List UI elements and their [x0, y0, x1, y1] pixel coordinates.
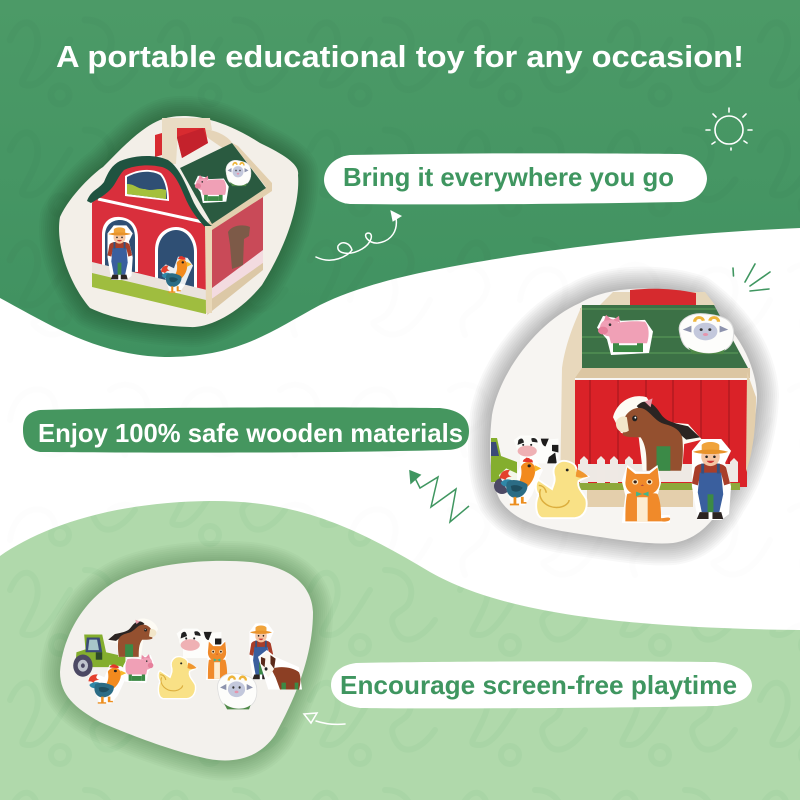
icon: tractor [491, 438, 517, 494]
blob backdrop [59, 116, 298, 327]
icon: farmer figure [249, 623, 274, 680]
blob shadow [59, 116, 298, 327]
blob shadow [60, 561, 313, 761]
icon: cat figure [206, 640, 232, 680]
pill: screen-free playtime: Encourage screen-free playtime [340, 670, 737, 700]
icon: pig toy [597, 315, 653, 355]
icon: duck toy [536, 461, 588, 518]
pill: bring it everywhere [324, 153, 707, 204]
pill: bring it everywhere: Bring it everywhere you go [343, 162, 674, 192]
arrow: small white back [304, 713, 345, 724]
pill: safe wooden materials [23, 407, 469, 453]
pill: safe wooden materials: Enjoy 100% safe wooden materials [38, 418, 463, 448]
icon: sheep figure [218, 673, 257, 709]
icon: pig sticker [194, 175, 229, 203]
icon: sun [706, 108, 752, 150]
icon: farmer toy [692, 439, 731, 520]
icon: cat toy [622, 465, 670, 523]
blob backdrop [60, 561, 313, 761]
panel: figures photo [60, 561, 313, 761]
icon: pig figure [123, 654, 154, 683]
blob shadow [490, 289, 757, 543]
icon: horse toy [613, 396, 702, 471]
blob backdrop [490, 289, 757, 543]
icon: cow [514, 436, 558, 463]
arrow: curly white [316, 211, 401, 260]
icon: tractor figure [73, 634, 125, 677]
pill: screen-free playtime [331, 661, 752, 708]
icon: sheep toy [679, 314, 734, 354]
panel: barn close-up photo [490, 289, 757, 543]
icon: rooster figure [88, 664, 128, 704]
panel: barn photo [59, 116, 298, 327]
bottom light green wave [0, 501, 800, 800]
icon: barn close-up [560, 289, 756, 507]
icon: horse figure [107, 619, 158, 657]
icon: duck figure [158, 657, 197, 699]
icon: cow figure [177, 629, 221, 658]
top green wave [0, 0, 800, 357]
title: A portable educational toy for any occasion! [56, 39, 744, 74]
icon: farmer sticker [108, 225, 133, 280]
icon: rooster sticker [160, 256, 193, 293]
icon: barn toy [87, 118, 272, 315]
arrow: zigzag green [410, 471, 469, 522]
icon: dog figure [258, 650, 302, 690]
icon: sheep sticker [226, 160, 251, 186]
icon: rooster toy [499, 458, 543, 505]
icon: spark lines [733, 264, 770, 291]
